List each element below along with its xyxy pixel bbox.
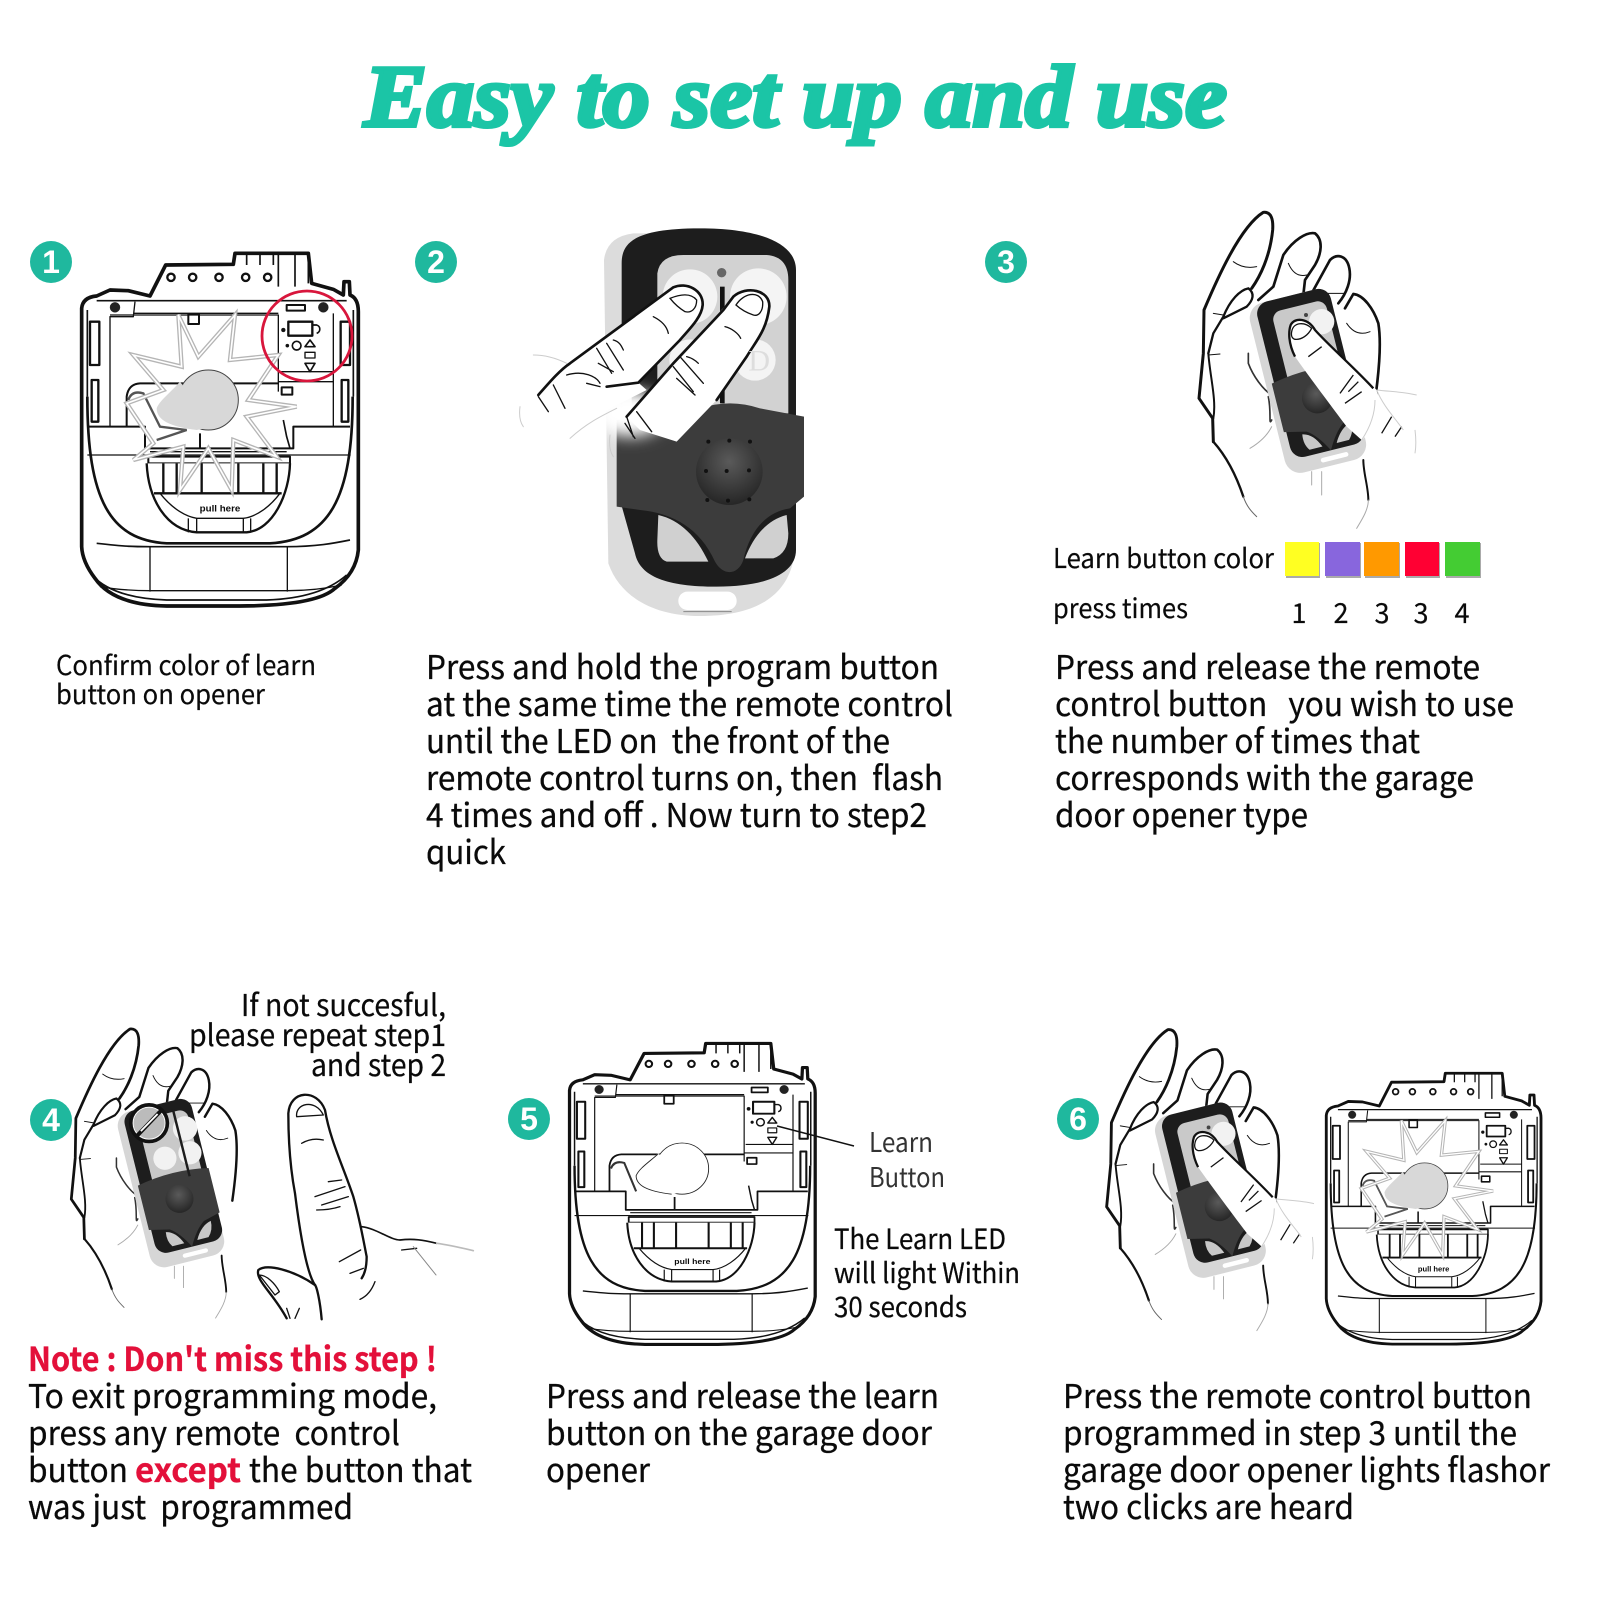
step 3 caption: door opener type bbox=[1055, 789, 1308, 837]
step 6 caption: garage door opener lights flashor bbox=[1063, 1444, 1550, 1492]
step 3 caption: corresponds with the garage bbox=[1055, 752, 1474, 800]
step 4 number badge: 4 bbox=[42, 1102, 60, 1138]
step 2 number badge bbox=[415, 241, 457, 283]
step 6 panel bbox=[1057, 1029, 1550, 1529]
learn button colour legend: press times bbox=[1053, 587, 1188, 626]
step 3 caption: Press and release the remote bbox=[1055, 641, 1480, 689]
step 3 caption: the number of times that bbox=[1055, 715, 1420, 763]
learn LED note bbox=[834, 1218, 1020, 1326]
step 4 number badge bbox=[30, 1099, 72, 1141]
step 5 caption: button on the garage door bbox=[546, 1407, 932, 1455]
step 4 caption: button bbox=[28, 1444, 128, 1492]
learn button colour legend: 1 bbox=[1292, 592, 1306, 631]
learn button colour legend: Learn button color bbox=[1053, 537, 1274, 576]
step 3 caption: control button you wish to use bbox=[1055, 678, 1514, 726]
step 6 caption: programmed in step 3 until the bbox=[1063, 1407, 1517, 1455]
step 2 caption: Press and hold the program button bbox=[426, 641, 939, 689]
step 6 number badge bbox=[1057, 1098, 1099, 1140]
step 2 caption: quick bbox=[426, 826, 506, 874]
step 6 caption: Press the remote control button bbox=[1063, 1370, 1532, 1418]
step 5 caption: Press and release the learn bbox=[546, 1370, 939, 1418]
learn button leader line bbox=[777, 1126, 854, 1146]
garage door opener with lit bulb: pull here bbox=[1418, 1267, 1450, 1274]
step 6 caption bbox=[1063, 1370, 1550, 1529]
step 2 caption: until the LED on the front of the bbox=[426, 715, 890, 763]
garage door opener, bulb off bbox=[570, 1043, 815, 1344]
learn button colour legend: 3 bbox=[1414, 592, 1428, 631]
not-successful note: If not succesful, bbox=[241, 981, 446, 1025]
step 1 number badge bbox=[30, 241, 72, 283]
learn button label bbox=[869, 1121, 945, 1195]
step 2 number badge: 2 bbox=[427, 244, 445, 280]
step 5 caption bbox=[546, 1370, 939, 1492]
learn button colour legend: 2 bbox=[1334, 592, 1348, 631]
not-successful note: and step 2 bbox=[311, 1041, 446, 1085]
step 4 panel bbox=[28, 981, 473, 1529]
step 3 number badge bbox=[985, 241, 1027, 283]
not-successful note bbox=[189, 981, 446, 1085]
step 1 caption bbox=[56, 644, 316, 712]
not-successful note: please repeat step1 bbox=[189, 1011, 446, 1055]
step 1 panel bbox=[30, 241, 358, 712]
learn button label: Learn bbox=[869, 1121, 933, 1160]
step 2 caption bbox=[426, 641, 953, 874]
step 4 caption: Note : Don't miss this step ! bbox=[28, 1333, 437, 1381]
hand pressing remote bbox=[1199, 212, 1417, 528]
learn button colour legend: 3 bbox=[1374, 592, 1390, 631]
title: Easy to set up and use bbox=[363, 49, 1227, 146]
remote control pressed by two fingers: D bbox=[748, 345, 770, 378]
step 1 caption: Confirm color of learn bbox=[56, 644, 316, 683]
step 3 number badge: 3 bbox=[997, 244, 1015, 280]
step 4 caption: To exit programming mode, bbox=[28, 1370, 437, 1418]
step 4 caption: press any remote control bbox=[28, 1407, 400, 1455]
step 6 caption: two clicks are heard bbox=[1063, 1481, 1354, 1529]
learn LED note: 30 seconds bbox=[834, 1286, 967, 1326]
red circle highlighting learn button bbox=[262, 291, 352, 381]
garage door opener, bulb off: pull here bbox=[674, 1257, 711, 1266]
step 4 caption: the button that bbox=[249, 1444, 472, 1492]
step 3 panel bbox=[985, 212, 1514, 837]
step 2 caption: remote control turns on, then flash bbox=[426, 752, 943, 800]
step 4 caption: except bbox=[135, 1444, 241, 1492]
pointing finger bbox=[258, 1095, 473, 1319]
hand holding remote with crossed-out button bbox=[71, 1028, 237, 1318]
learn button label: Button bbox=[869, 1156, 945, 1195]
learn LED note: The Learn LED bbox=[834, 1218, 1006, 1258]
step 5 number badge: 5 bbox=[520, 1101, 538, 1137]
step 5 caption: opener bbox=[546, 1444, 650, 1492]
step 1 number badge: 1 bbox=[42, 244, 60, 280]
step 1 caption: button on opener bbox=[56, 673, 265, 712]
step 2 caption: at the same time the remote control bbox=[426, 678, 953, 726]
step 6 number badge: 6 bbox=[1069, 1101, 1087, 1137]
hand pressing remote bbox=[1107, 1029, 1314, 1331]
garage door opener with lit bulb: pull here bbox=[200, 504, 240, 514]
remote control pressed by two fingers bbox=[520, 228, 804, 616]
step 2 panel bbox=[415, 228, 953, 874]
step 5 number badge bbox=[508, 1098, 550, 1140]
step 4 caption bbox=[28, 1333, 472, 1529]
garage door opener with lit bulb bbox=[82, 253, 358, 606]
step 5 panel bbox=[508, 1043, 1020, 1492]
learn button colour legend: 4 bbox=[1454, 592, 1470, 631]
garage door opener with lit bulb bbox=[1326, 1073, 1541, 1344]
learn button colour legend bbox=[1053, 537, 1481, 631]
step 2 caption: 4 times and off . Now turn to step2 bbox=[426, 789, 927, 837]
step 3 caption bbox=[1055, 641, 1514, 837]
step 4 caption: was just programmed bbox=[28, 1481, 353, 1529]
learn LED note: will light Within bbox=[834, 1252, 1020, 1292]
